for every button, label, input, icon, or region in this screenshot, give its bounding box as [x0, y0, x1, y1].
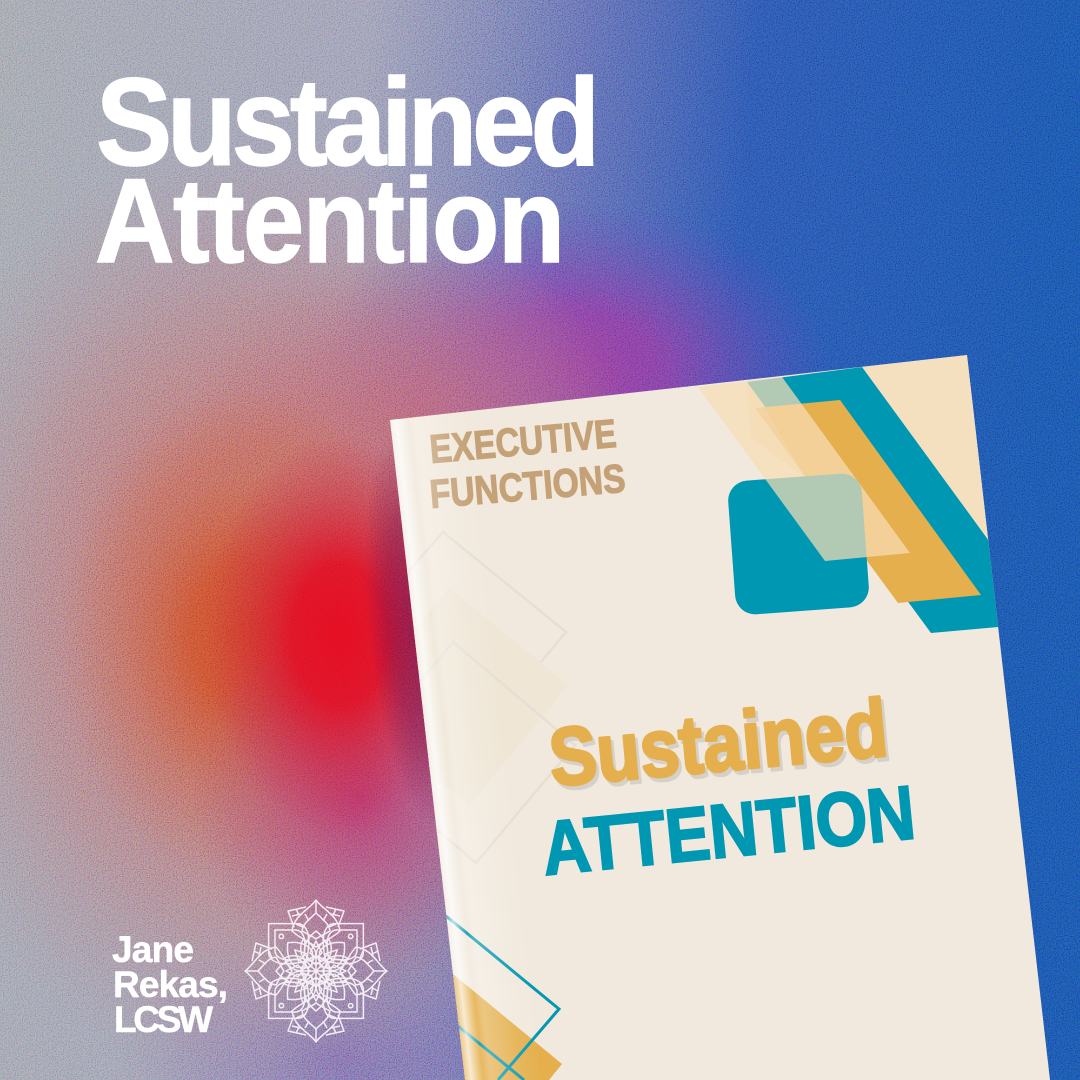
teal diagonal band [747, 367, 1010, 633]
executive functions label [428, 412, 627, 517]
faint filled diamond [414, 630, 541, 773]
author name: LCSW [114, 999, 213, 1040]
title: Sustained [96, 54, 600, 192]
book title: attention: ATTENTION [538, 770, 919, 892]
pale translucent parallelogram [698, 377, 910, 561]
title [95, 54, 600, 288]
icon: mandala logo [245, 900, 387, 1042]
author name: Jane [112, 929, 194, 970]
teal outline bottom diamond [446, 916, 559, 1080]
book mockup [340, 355, 1050, 1080]
author name: Rekas, [113, 964, 228, 1005]
pale fold accent [747, 382, 805, 477]
faint diamond outline one [407, 530, 568, 721]
teal rounded square [727, 472, 870, 616]
executive functions label: FUNCTIONS [428, 457, 627, 517]
author name [112, 929, 228, 1040]
top right peach triangle [862, 355, 990, 545]
spine highlight [390, 411, 545, 1080]
teal crossing line [458, 1026, 524, 1080]
book title: sustained: Sustained [548, 687, 894, 808]
title: Attention [95, 155, 565, 288]
gold bottom diamond [453, 974, 562, 1080]
gold diagonal band [755, 400, 981, 603]
faint diamond outline two [420, 658, 576, 864]
book cover [390, 355, 1050, 1080]
executive functions label: EXECUTIVE [428, 412, 618, 472]
book title: sustained: Sustained [545, 683, 891, 804]
cover artwork [340, 355, 1010, 1080]
